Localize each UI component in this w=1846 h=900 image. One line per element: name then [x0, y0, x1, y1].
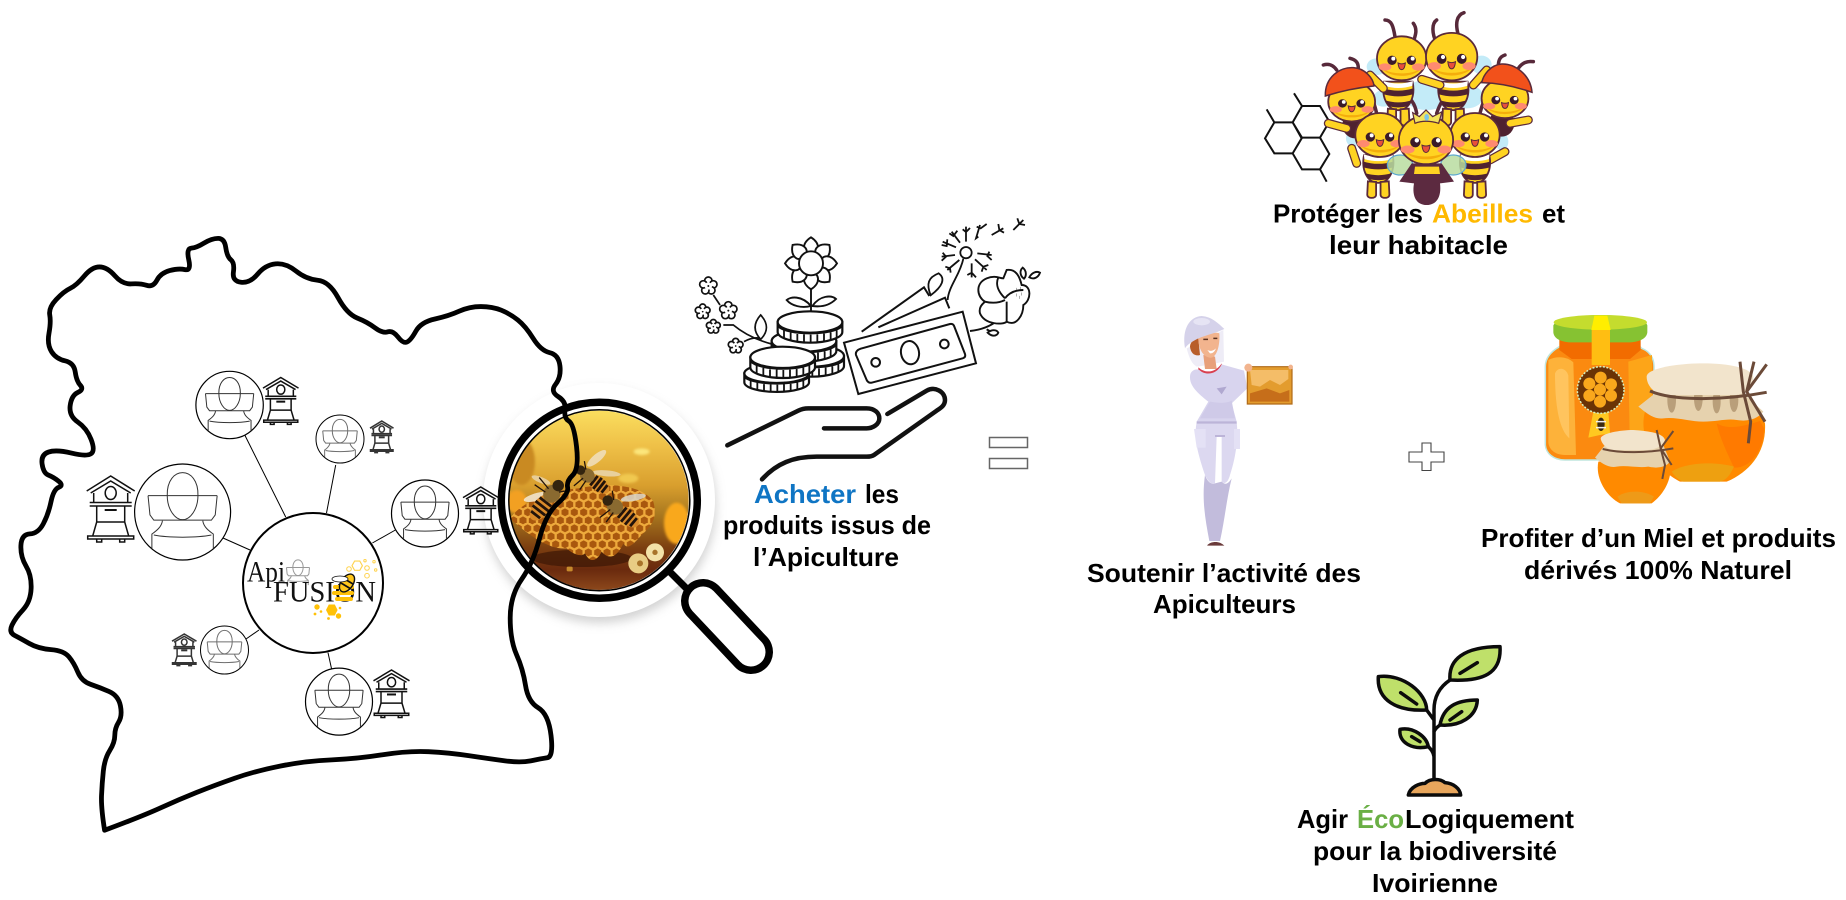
text: Profiter d'un Miel et produits dérivés 100% Naturel: dérivés 100% Naturel: [1524, 555, 1792, 585]
icon: beehive top: [263, 378, 299, 424]
text: Acheter les produits issus de l'Apiculture: [723, 479, 931, 572]
sunflower: [785, 237, 837, 312]
large jar: [1545, 315, 1654, 460]
beekeeper node: left large: [135, 464, 231, 560]
blossom branch: [695, 277, 772, 353]
top bees: [1377, 33, 1477, 80]
text: Profiter d'un Miel et produits dérivés 100% Naturel: Profiter d’un Miel et produits: [1481, 523, 1836, 553]
equals sign: [990, 438, 1028, 468]
ApiFusion logo in central circle: [243, 513, 383, 653]
text: Agir ÉcoLogiquement pour la biodiversité Ivoirienne: Ivoirienne: [1372, 868, 1498, 898]
icon: beehive right: [463, 487, 499, 534]
icon: coins, banknotes, flowers and open hand: [695, 218, 1040, 479]
hat: [1184, 316, 1224, 348]
text: Soutenir l'activité des Apiculteurs: [1087, 558, 1361, 619]
helmet bee left: [1325, 68, 1375, 121]
text: Protéger les Abeilles et leur habitacle: [1273, 198, 1565, 260]
wings: [1346, 56, 1508, 150]
neck and hair: [1203, 355, 1217, 369]
coin stacks: [744, 311, 844, 392]
text: Agir ÉcoLogiquement pour la biodiversité Ivoirienne: Éco: [1357, 804, 1404, 834]
helmet bee right: [1482, 64, 1532, 118]
plus sign: [1409, 443, 1444, 470]
icon: seedling plant: [1378, 647, 1500, 795]
text: Acheter les produits issus de l'Apiculture: l’Apiculture: [753, 542, 899, 572]
text: Agir ÉcoLogiquement pour la biodiversité Ivoirienne: [1297, 804, 1574, 898]
suit legs: [1204, 475, 1232, 541]
text: Acheter les produits issus de l'Apiculture: les: [865, 479, 899, 509]
arms: [1328, 70, 1528, 163]
beekeeper node: bottom: [306, 668, 372, 735]
face: [1198, 333, 1219, 358]
icon: beehive small bottom left: [172, 634, 196, 666]
banknotes: [844, 287, 976, 394]
icon: beehive left: [87, 476, 135, 542]
illustration: beekeeper holding a honey frame: [1184, 316, 1293, 546]
magnifying glass frame and handle: [501, 402, 751, 652]
text: Soutenir l'activité des Apiculteurs: Apiculteurs: [1153, 589, 1296, 619]
magnifying glass photo: bees on honeycomb: [507, 408, 690, 592]
text: Protéger les Abeilles et leur habitacle: Protéger les: [1273, 198, 1423, 228]
illustration: group of cartoon bees: [1323, 13, 1533, 205]
text: Protéger les Abeilles et leur habitacle: leur habitacle: [1329, 230, 1508, 260]
front bee heads: [1355, 110, 1500, 164]
icon: honeycomb hexagons: [1265, 93, 1329, 182]
text: Protéger les Abeilles et leur habitacle: et: [1542, 198, 1565, 228]
ApiFusion logo in central circle: FUSION: [273, 576, 376, 609]
back bees bodies: [1342, 81, 1514, 138]
text: Protéger les Abeilles et leur habitacle: Abeilles: [1432, 198, 1533, 228]
text: Agir ÉcoLogiquement pour la biodiversité Ivoirienne: Logiquement: [1405, 804, 1574, 834]
text: Agir ÉcoLogiquement pour la biodiversité Ivoirienne: Agir: [1297, 804, 1348, 834]
beekeeper node: small top: [316, 415, 364, 463]
map outline of Côte d'Ivoire: [11, 238, 577, 830]
boot: [1207, 542, 1224, 546]
text: Acheter les produits issus de l'Apiculture: produits issus de: [723, 510, 931, 540]
front bee bodies: [1363, 154, 1490, 205]
suit torso: [1190, 364, 1247, 422]
big pot: [1638, 362, 1767, 482]
illustration: honey jars: [1545, 315, 1767, 503]
hibiscus: [970, 268, 1040, 336]
network connector lines: [223, 436, 395, 669]
hand: [727, 389, 945, 479]
text: Acheter les produits issus de l'Apiculture: Acheter: [754, 479, 856, 509]
beekeeper node: top: [196, 371, 263, 439]
icon: beehive bottom: [374, 670, 410, 718]
dandelion: [925, 218, 1025, 300]
frame of honeycomb: [1247, 367, 1292, 404]
veil: [1187, 330, 1224, 367]
beekeeper node: small bottom left: [200, 626, 248, 674]
icon: beehive small top: [370, 421, 394, 453]
text: Profiter d'un Miel et produits dérivés 100% Naturel: [1481, 523, 1836, 585]
text: Soutenir l'activité des Apiculteurs: Soutenir l’activité des: [1087, 558, 1361, 588]
text: Agir ÉcoLogiquement pour la biodiversité Ivoirienne: pour la biodiversité: [1313, 836, 1557, 866]
ApiFusion logo in central circle: Api: [247, 556, 285, 588]
beekeeper node: right: [392, 480, 458, 547]
magnifier lens halo: [483, 383, 716, 623]
collar: [1198, 363, 1222, 374]
small pot: [1595, 430, 1673, 503]
antennae: [1323, 13, 1533, 117]
